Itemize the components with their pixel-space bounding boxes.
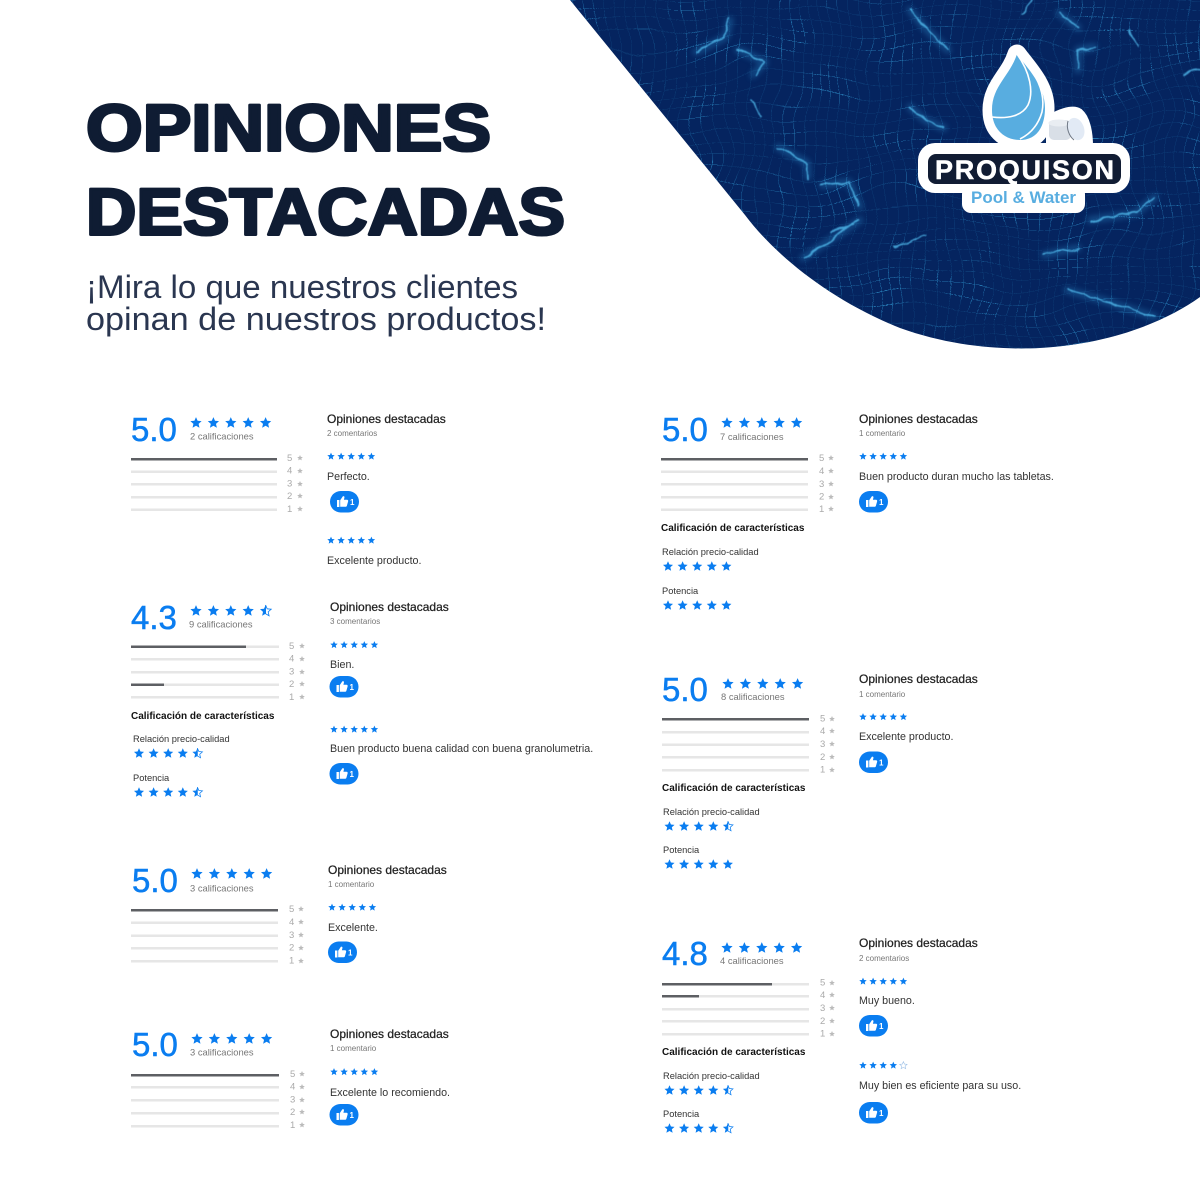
rating stars [722,678,803,689]
comment 1 [330,641,378,698]
rating count: 9 calificaciones [189,618,253,630]
comment 2 [330,726,593,784]
comment 1: 1 [879,1022,884,1031]
rating score: 5.0 [662,411,708,448]
rating score: 5.0 [662,671,708,708]
distribution bars: 2 [819,492,824,502]
comment 1: 1 [350,498,355,507]
comment 1 [859,713,953,773]
rating count: 3 calificaciones [190,1046,254,1058]
characteristic: potencia [133,773,202,797]
distribution bars: 4 [287,466,292,476]
comment 2: Muy bien es eficiente para su uso. [859,1080,1021,1092]
icon: water drop [992,54,1045,140]
distribution bars [662,714,835,776]
distribution bars: 3 [290,1094,295,1106]
comments heading: Opiniones destacadas [330,600,449,614]
rating score: 4.8 [662,935,708,972]
characteristic: relación precio-calidad: Relación precio-calidad [663,807,760,817]
distribution bars: 2 [820,752,825,763]
water background blob [570,0,1200,348]
comments heading: Opiniones destacadas [330,1027,449,1041]
comment 1: Excelente. [328,922,378,934]
logo name plate [928,154,1121,184]
distribution bars [662,978,835,1040]
comment 1 [327,453,375,512]
rating stars [191,1033,272,1044]
rating score: 4.3 [131,599,177,636]
characteristic: potencia: Potencia [663,1109,700,1119]
distribution bars: 2 [289,679,294,690]
comment 1: 1 [879,498,884,507]
title: OPINIONES [86,90,491,164]
panel: review 4.8, 4 calificaciones [662,935,1021,1133]
comments count: 2 comentarios [327,429,377,438]
logo sticker outline [918,54,1130,213]
characteristic: relación precio-calidad: Relación precio-calidad [663,1071,760,1081]
distribution bars: 1 [289,692,294,703]
panel: review 5.0, 2 calificaciones [131,411,446,567]
distribution bars: 5 [820,978,825,988]
comments heading: Opiniones destacadas [859,936,978,950]
distribution bars: 4 [289,654,294,664]
comment 2 [859,1062,1021,1124]
rating stars [190,605,271,616]
rating count: 8 calificaciones [721,691,785,702]
distribution bars: 1 [289,956,294,966]
subtitle: ¡Mira lo que nuestros clientes [86,269,518,305]
distribution bars: 5 [287,453,292,464]
rating count: 7 calificaciones [720,431,784,442]
characteristic: relación precio-calidad [662,547,759,571]
rating count: 2 calificaciones [190,430,254,442]
title: DESTACADAS [86,174,565,248]
comment 1 [328,904,378,963]
rating stars [191,868,272,879]
panel: review 5.0, 7 calificaciones [661,411,1054,610]
distribution bars: 2 [820,1016,825,1027]
comments count: 2 comentarios [859,954,909,963]
comment 2: 1 [350,770,354,779]
comment 1: Excelente producto. [859,731,953,743]
comment 1: Muy bueno. [859,995,915,1007]
characteristics heading: Calificación de características [662,783,806,794]
distribution bars: 4 [820,726,825,737]
distribution bars: 5 [289,641,294,652]
rating score: 5.0 [131,411,177,448]
characteristic: relación precio-calidad [663,1071,760,1095]
comment 1: 1 [879,758,884,768]
distribution bars [131,453,303,515]
characteristic: potencia [663,1109,733,1133]
rating score: 5.0 [132,862,178,899]
characteristics heading: Calificación de características [662,1047,806,1058]
comment 2: Buen producto buena calidad con buena granolumetria. [330,743,593,755]
distribution bars: 1 [820,764,825,776]
comment 1: Perfecto. [327,471,370,483]
comments count: 1 comentario [859,429,906,438]
distribution bars: 1 [290,1120,295,1131]
icon: tablets [1048,115,1087,143]
panel: review 5.0, 3 calificaciones (second) [131,1026,450,1131]
comments count: 1 comentario [330,1044,377,1053]
comment 1: Buen producto duran mucho las tabletas. [859,471,1054,483]
distribution bars: 3 [820,1003,825,1014]
characteristic: relación precio-calidad: Relación precio-calidad [133,734,230,744]
characteristics heading: Calificación de características [131,711,275,722]
title [86,90,565,248]
comment 1 [330,1068,450,1126]
comment 1 [859,978,915,1036]
characteristic: potencia: Potencia [662,586,699,596]
logo name: PROQUISON [935,155,1114,185]
comment 1: 1 [348,948,353,958]
comment 1: Excelente lo recomiendo. [330,1087,450,1099]
characteristic: potencia: Potencia [663,845,700,855]
distribution bars: 5 [820,714,825,724]
characteristic: relación precio-calidad [133,734,230,758]
panel: review 5.0, 8 calificaciones [662,671,978,869]
distribution bars: 1 [287,504,292,515]
comment 2: Excelente producto. [327,555,421,567]
logo tagline: Pool & Water [971,189,1077,207]
distribution bars: 3 [289,666,294,678]
rating stars [721,417,802,428]
comments count: 3 comentarios [330,617,380,626]
distribution bars: 5 [289,904,294,915]
comments heading: Opiniones destacadas [859,412,978,426]
distribution bars: 4 [289,917,294,928]
distribution bars: 3 [289,930,294,941]
characteristic: potencia: Potencia [133,773,170,783]
rating score: 5.0 [132,1026,178,1063]
logo: Proquison Pool & Water [918,54,1130,213]
comments count: 1 comentario [328,880,375,889]
distribution bars: 5 [819,453,824,464]
comment 2: 1 [879,1109,884,1118]
comments count: 1 comentario [859,690,906,699]
characteristic: potencia [663,845,733,869]
distribution bars [131,1069,305,1131]
distribution bars: 1 [819,504,824,515]
characteristic: relación precio-calidad: Relación precio-calidad [662,547,759,557]
subtitle [86,269,546,337]
characteristic: potencia [662,586,731,610]
panel: review 4.3, 9 calificaciones [131,599,593,797]
subtitle: opinan de nuestros productos! [86,301,546,337]
characteristic: relación precio-calidad [663,807,760,831]
distribution bars: 3 [819,479,824,490]
distribution bars: 2 [287,491,292,502]
comment 2 [327,537,421,567]
distribution bars: 1 [820,1028,825,1040]
distribution bars: 5 [290,1069,295,1080]
distribution bars: 4 [819,466,824,477]
characteristics heading: Calificación de características [661,523,805,534]
distribution bars: 3 [820,739,825,750]
comment 1: 1 [350,683,354,692]
comment 1: 1 [350,1111,354,1120]
comments heading: Opiniones destacadas [327,412,446,426]
distribution bars: 4 [820,990,825,1001]
distribution bars: 2 [289,942,294,954]
rating stars [190,417,271,428]
distribution bars [131,641,305,703]
distribution bars [661,453,834,515]
panel: review 5.0, 3 calificaciones [131,862,447,966]
comments heading: Opiniones destacadas [328,863,447,877]
comment 1 [859,453,1054,512]
distribution bars: 3 [287,478,292,490]
distribution bars: 2 [290,1107,295,1118]
comments heading: Opiniones destacadas [859,672,978,686]
rating count: 3 calificaciones [190,882,254,894]
comment 1: Bien. [330,659,354,671]
rating stars [721,942,802,953]
distribution bars: 4 [290,1082,295,1092]
distribution bars [131,904,304,966]
rating count: 4 calificaciones [720,955,784,966]
